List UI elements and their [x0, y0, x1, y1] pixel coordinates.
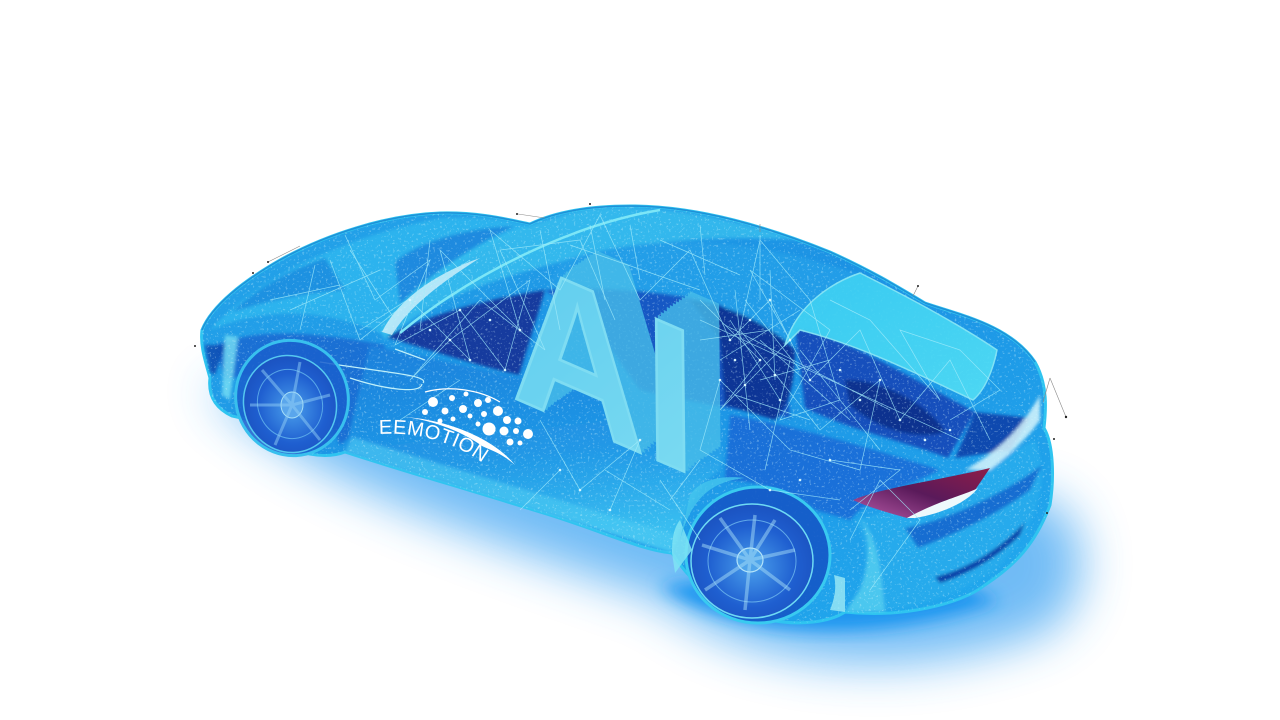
- logo arc: [425, 389, 500, 402]
- ground shadow: [205, 385, 1082, 664]
- speckle texture: [190, 200, 1060, 630]
- windshield strip: [380, 207, 800, 340]
- logo wordmark: EEMOTION: [380, 420, 489, 462]
- network nodes: [409, 299, 951, 511]
- EEMOTION logo: [380, 388, 533, 465]
- body shell: [202, 206, 1052, 623]
- rear glass panel: [785, 273, 997, 400]
- lower fender dark: [215, 333, 385, 445]
- rear quarter panel: [725, 415, 940, 520]
- rocker stripe: [345, 437, 678, 553]
- rear seat dark: [795, 328, 975, 458]
- rear wheel: [672, 477, 845, 623]
- side window dark: [387, 290, 545, 375]
- hood highlight: [210, 217, 530, 335]
- rim bright edge: [845, 515, 885, 612]
- roof panel: [545, 242, 860, 345]
- centre cabin dark behind A: [545, 289, 790, 418]
- front wheel: [217, 322, 367, 474]
- outer edge line: [202, 206, 1035, 362]
- front bumper bright edge: [222, 335, 238, 400]
- logo dots: [422, 392, 533, 446]
- tail light: [853, 468, 990, 518]
- car body: [200, 204, 1054, 624]
- stray network points outside car: [194, 203, 1067, 514]
- hood dark panels: [232, 258, 345, 312]
- windshield highlight streak: [382, 258, 480, 335]
- network lines overlay: [270, 215, 1000, 590]
- logo swoosh: [405, 417, 515, 465]
- side crease lines: [320, 349, 425, 390]
- interior shading: [190, 200, 1060, 630]
- A I lettering: AI: [510, 212, 697, 521]
- illustration: transparent blue AI car: [192, 203, 1115, 699]
- door lower panel: [345, 345, 722, 553]
- rear bumper bands: [905, 465, 1042, 548]
